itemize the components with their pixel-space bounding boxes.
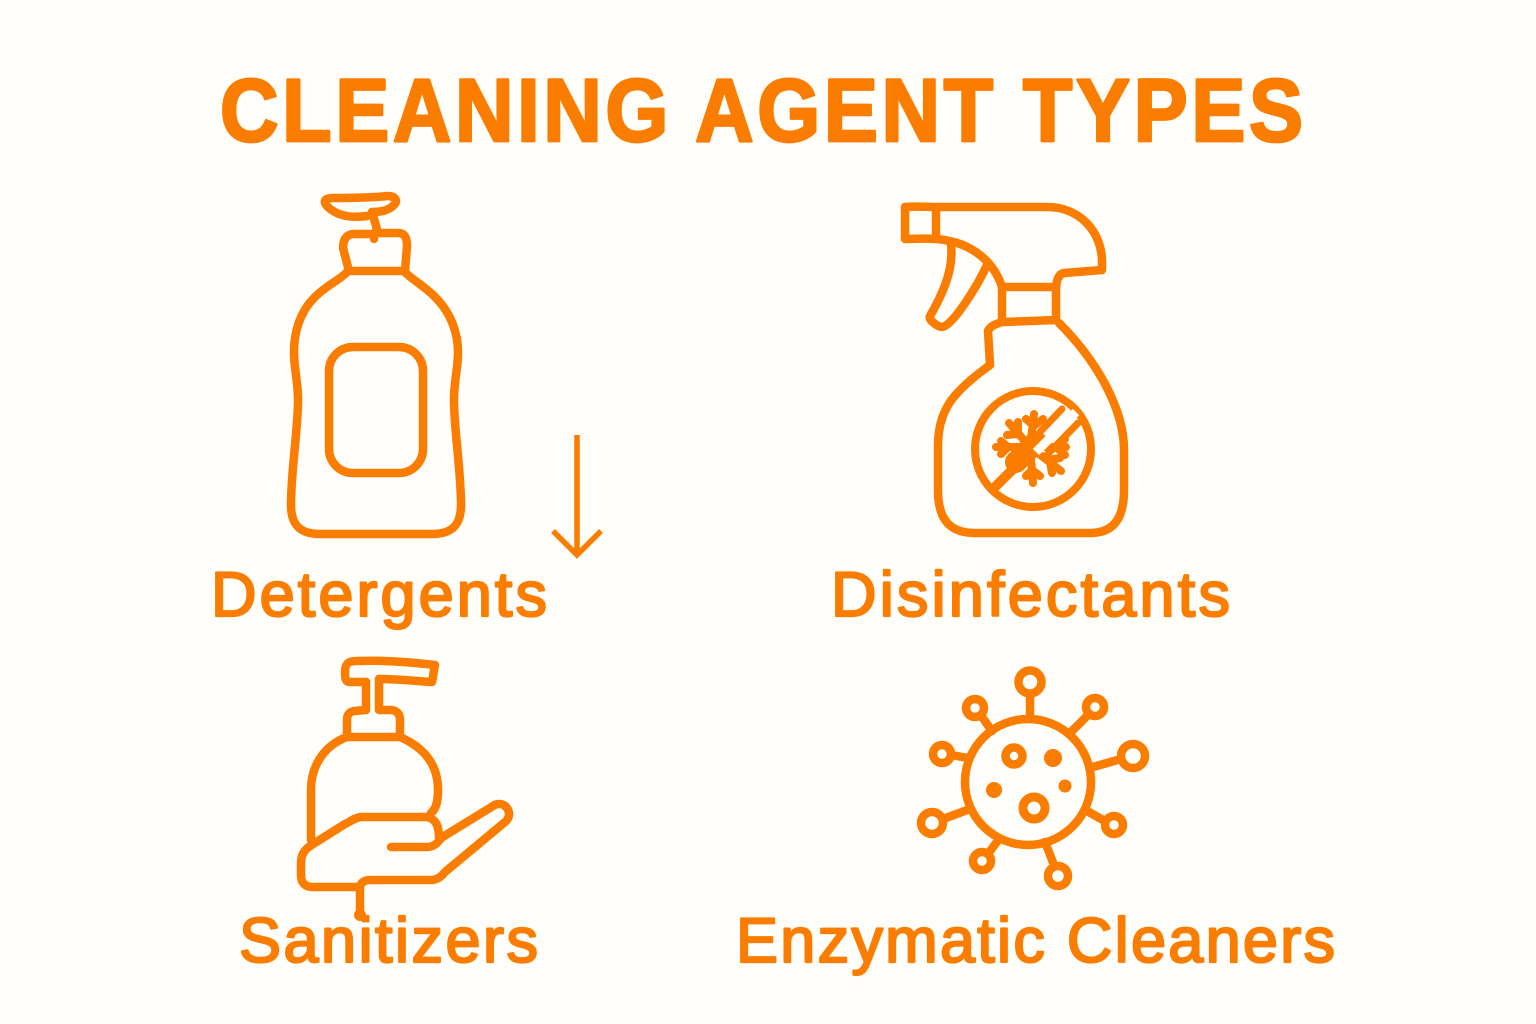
virus inner spots bbox=[986, 748, 1072, 819]
icon: sanitizer bottle over hand bbox=[301, 661, 509, 917]
icon: spray bottle bbox=[905, 207, 1124, 533]
no-snowflake symbol bbox=[975, 391, 1091, 507]
label: Detergents: Detergents bbox=[211, 560, 547, 630]
label: Enzymatic Cleaners: Enzymatic Cleaners bbox=[736, 906, 1335, 976]
detergent label plate bbox=[329, 347, 423, 473]
sanitizer drop bbox=[358, 913, 362, 917]
arrow bbox=[553, 435, 601, 555]
title: CLEANING AGENT TYPES bbox=[220, 61, 1303, 161]
icon: virus / enzyme bbox=[921, 670, 1145, 886]
label: Sanitizers: Sanitizers bbox=[239, 906, 538, 976]
label: Disinfectants: Disinfectants bbox=[831, 560, 1230, 630]
icon: detergent pump bottle bbox=[291, 196, 461, 534]
